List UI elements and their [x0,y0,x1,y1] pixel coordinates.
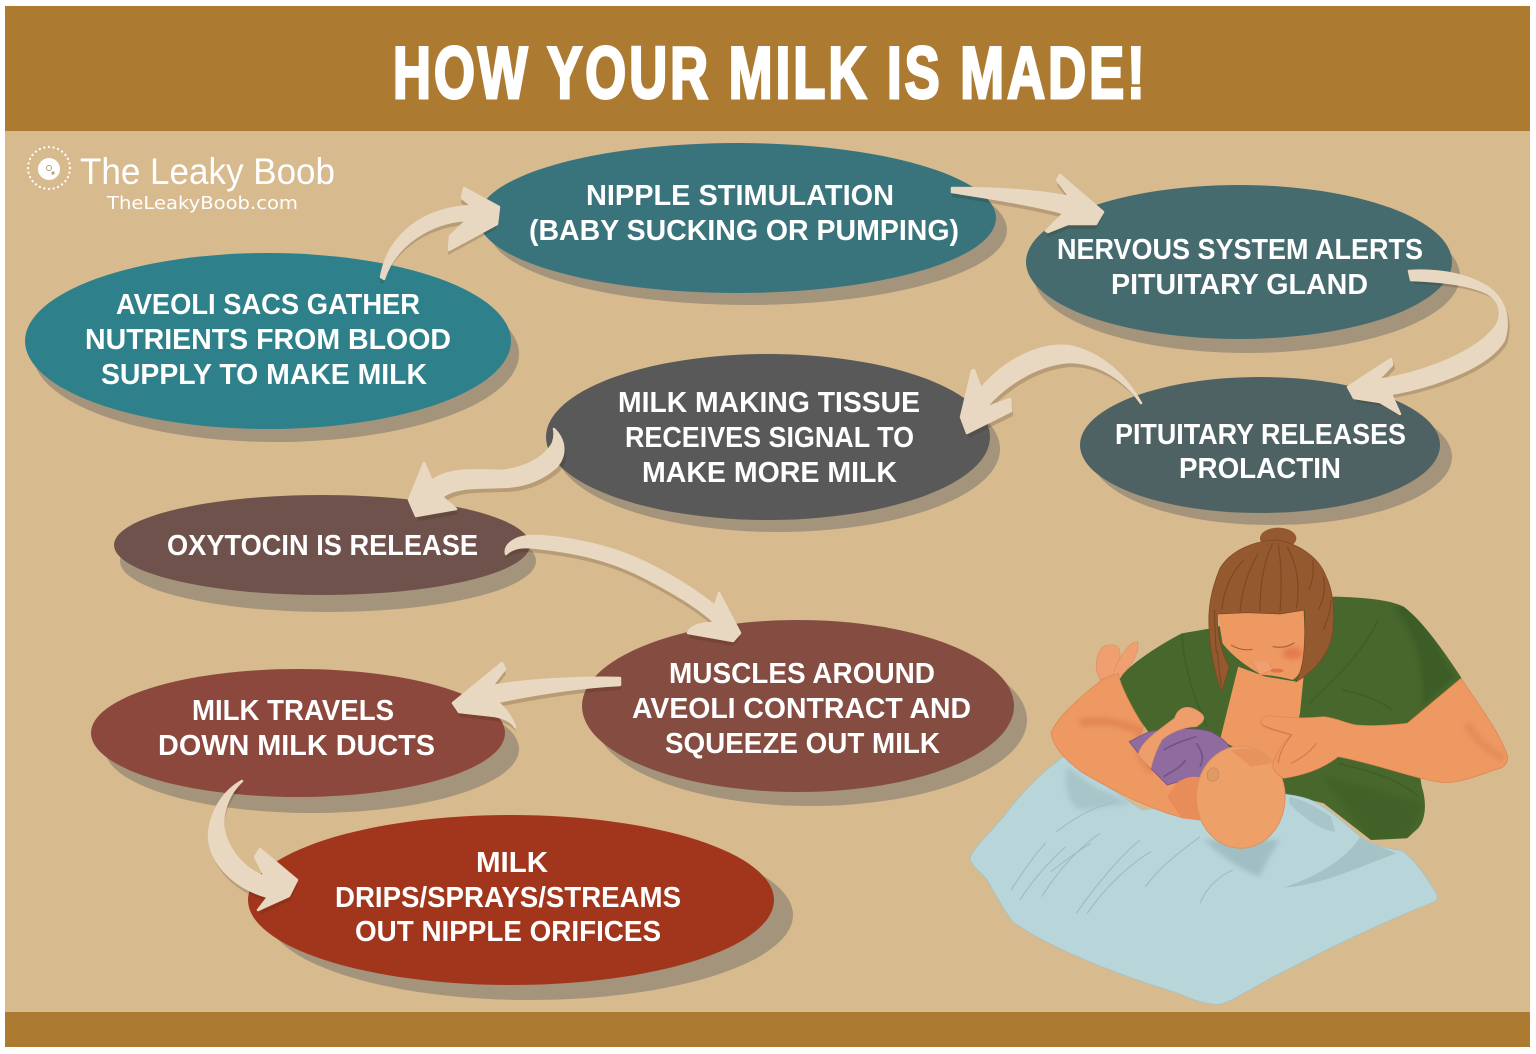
step: aveoli sacs: AVEOLI SACS GATHER [116,289,420,321]
arrow: oxytocin to muscles [506,536,740,646]
top banner [5,6,1530,131]
step: muscles contract: AVEOLI CONTRACT AND [632,693,971,725]
step: milk drips sprays streams: DRIPS/SPRAYS/STREAMS [335,882,681,914]
step: oxytocin: OXYTOCIN IS RELEASE [167,530,478,562]
mother's hand under baby [1167,777,1207,820]
step: nipple stimulation [478,143,1007,305]
baby arm [1138,707,1204,768]
icon: dotted circle with droplet [28,147,70,189]
step: milk drips sprays streams: OUT NIPPLE ORIFICES [355,916,661,948]
step: milk making tissue [546,354,1000,532]
step: pituitary releases prolactin [1080,377,1452,525]
feet of baby [1096,642,1138,680]
step: muscles contract: MUSCLES AROUND [669,658,935,690]
logo: The Leaky Boob [28,147,335,214]
left arm [1051,673,1207,820]
step: milk travels: MILK TRAVELS [192,695,394,727]
arrow: muscles to travels [453,663,621,732]
step: aveoli sacs: NUTRIENTS FROM BLOOD [85,324,451,356]
step: milk travels: DOWN MILK DUCTS [158,730,435,762]
mother's face [1217,609,1305,680]
bottom banner [5,1012,1530,1047]
step: aveoli sacs: SUPPLY TO MAKE MILK [101,359,427,391]
step: nervous system: PITUITARY GLAND [1111,269,1368,301]
step: nervous system [1026,185,1460,353]
right arm and hand [1261,678,1508,783]
step: nipple stimulation: (BABY SUCKING OR PUMPING) [529,215,959,247]
arrow: travels to milk [209,781,298,915]
baby body in purple outfit [1129,728,1231,796]
step: nervous system: NERVOUS SYSTEM ALERTS [1057,234,1423,266]
arrow: pituitary to tissue [961,346,1143,438]
step: nipple stimulation: NIPPLE STIMULATION [586,180,894,212]
website: TheLeakyBoob.com [106,193,298,214]
step: pituitary releases prolactin: PITUITARY RELEASES [1115,419,1406,451]
step: milk making tissue: MAKE MORE MILK [642,457,897,489]
illustration: mother breastfeeding baby [970,528,1508,1004]
step: milk drips sprays streams: MILK [476,847,548,879]
step: pituitary releases prolactin: PROLACTIN [1179,453,1341,485]
hair [1209,528,1334,692]
step: milk making tissue: MILK MAKING TISSUE [618,387,920,419]
step: milk travels [91,669,519,813]
step: milk making tissue: RECEIVES SIGNAL TO [625,422,914,454]
baby head [1196,746,1285,848]
step: muscles contract: SQUEEZE OUT MILK [665,728,940,760]
arrow: nipple to nervous [952,175,1103,237]
step: muscles contract [582,620,1027,806]
chest [1220,667,1304,767]
arrow: tissue to oxytocin [409,429,566,521]
step: milk drips sprays streams [248,815,793,1000]
green shirt [1118,597,1462,840]
brand name: The Leaky Boob [80,151,335,192]
step: aveoli sacs [25,253,519,442]
step: oxytocin [114,495,536,612]
title: HOW YOUR MILK IS MADE! [393,33,1145,114]
arrow: aveoli to nipple [380,188,499,284]
blanket [970,757,1437,1004]
arrow: nervous to pituitary [1348,271,1510,418]
